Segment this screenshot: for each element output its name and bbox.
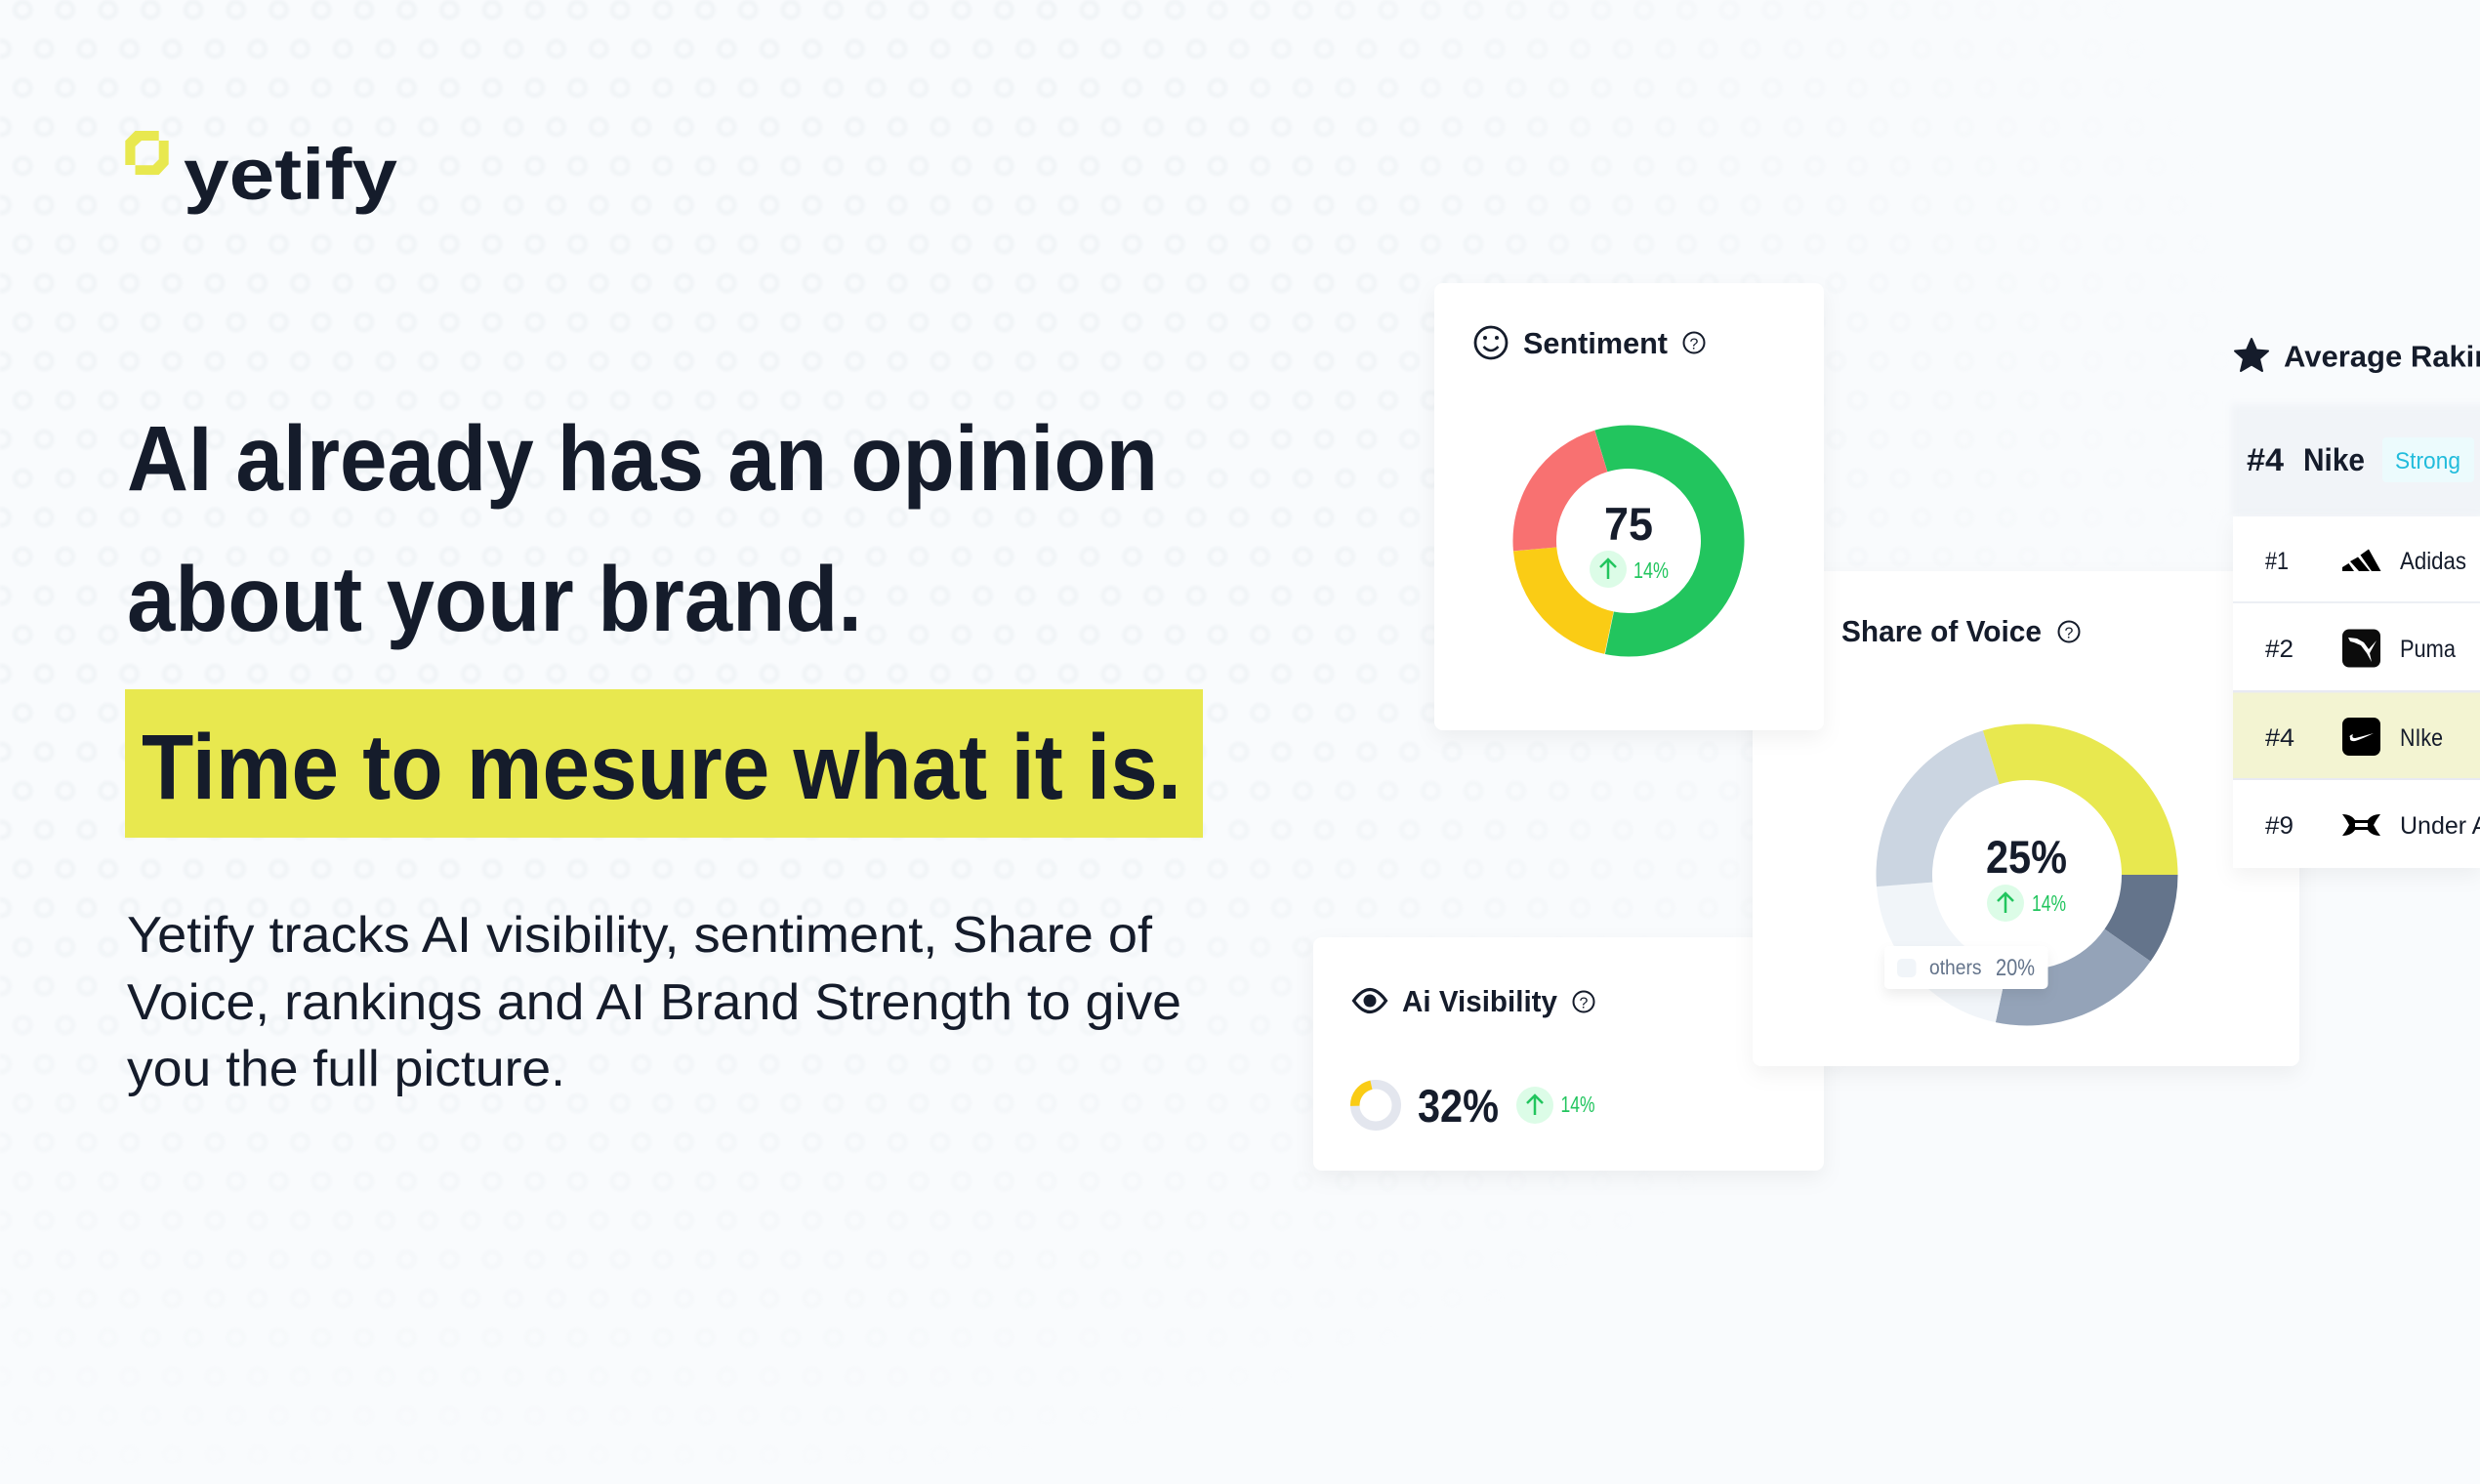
icon: help: ? <box>1690 336 1699 353</box>
heading: about your brand. <box>127 548 862 651</box>
trend badge <box>1516 1087 1595 1124</box>
ranking header row: #4 <box>2247 442 2284 477</box>
row: Adidas <box>2265 548 2466 575</box>
ranking header row: Strong <box>2395 448 2460 474</box>
highlighted heading <box>125 689 1203 838</box>
icon: star <box>2235 339 2268 371</box>
icon: logo mark <box>125 131 169 175</box>
ranking table <box>2233 516 2480 868</box>
row: Under Armour <box>2265 812 2480 840</box>
panel: average ranking <box>2231 339 2480 868</box>
share title: Share of Voice <box>1841 615 2042 648</box>
icon: under armour <box>2342 814 2380 836</box>
visibility title: Ai Visibility <box>1402 985 1557 1018</box>
visibility value: 32% <box>1418 1080 1499 1132</box>
row: Under Armour: #9 <box>2265 812 2294 840</box>
body paragraph <box>127 907 1181 1097</box>
tooltip: others <box>1884 946 2048 989</box>
ranking header row: Nike <box>2303 442 2365 477</box>
heading <box>127 407 1158 651</box>
logo: yetify <box>125 131 397 215</box>
row: Adidas: Adidas <box>2400 548 2466 575</box>
ranking header row <box>2231 404 2480 516</box>
row: Nike <box>2265 718 2443 756</box>
icon: adidas stripes <box>2342 549 2380 571</box>
icon: puma <box>2342 629 2380 668</box>
trend badge: 14% <box>1633 557 1669 583</box>
icon: eye <box>1353 990 1386 1011</box>
trend badge: 14% <box>2032 890 2066 916</box>
heading: AI already has an opinion <box>127 407 1158 511</box>
row: Nike: NIke <box>2400 724 2443 752</box>
body paragraph: Yetify tracks AI visibility, sentiment, Share of <box>127 907 1153 964</box>
tooltip: others: 20% <box>1996 955 2035 981</box>
sentiment title: Sentiment <box>1523 327 1668 360</box>
icon: smiley <box>1475 327 1507 358</box>
icon: help: ? <box>2065 625 2074 642</box>
small donut <box>1354 1084 1397 1127</box>
icon: help <box>1574 992 1593 1011</box>
tooltip: others: others <box>1929 957 1982 979</box>
panel: AI visibility <box>1313 937 1824 1171</box>
trend badge <box>1987 885 2066 922</box>
icon: help: ? <box>1580 996 1589 1011</box>
trend badge <box>1590 551 1669 588</box>
row: Adidas: #1 <box>2265 548 2289 575</box>
body paragraph: you the full picture. <box>127 1041 565 1097</box>
infographic canvas <box>125 131 2480 1181</box>
panel: share of voice <box>1753 571 2299 1066</box>
panel: sentiment <box>1434 283 1824 730</box>
row: Puma: Puma <box>2400 636 2456 663</box>
icon: nike <box>2342 718 2380 756</box>
row: Puma: #2 <box>2265 636 2294 663</box>
sentiment donut chart <box>1511 424 1746 658</box>
highlighted heading: Time to mesure what it is. <box>142 716 1181 819</box>
share value: 25% <box>1986 831 2067 883</box>
row: Puma <box>2265 629 2456 668</box>
row: Nike: #4 <box>2265 724 2294 752</box>
body paragraph: Voice, rankings and AI Brand Strength to give <box>127 974 1181 1031</box>
logo wordmark: yetify <box>184 134 397 215</box>
sentiment value: 75 <box>1604 498 1653 550</box>
icon: help <box>1683 332 1705 353</box>
trend badge: 14% <box>1560 1092 1595 1117</box>
icon: help <box>2058 621 2080 642</box>
share donut chart <box>1856 704 2198 1046</box>
